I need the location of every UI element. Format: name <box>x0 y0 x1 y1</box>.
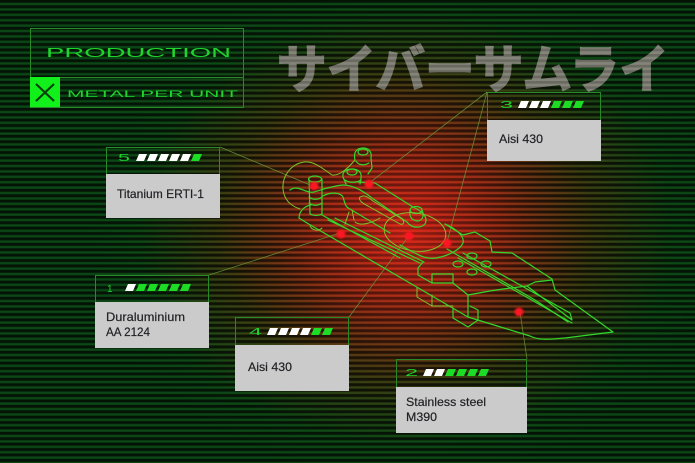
handle outer outline <box>283 160 355 209</box>
red marker dots <box>310 180 524 316</box>
knife wireframe drawing <box>283 148 613 339</box>
panel: material 2 stainless steel: M390 <box>406 410 437 424</box>
number 2: 2 <box>405 368 419 379</box>
label: Duraluminium <box>106 310 185 324</box>
title: サイバーサムライ <box>277 42 669 100</box>
bolt holes <box>453 253 491 275</box>
panel: material 4 aisi <box>235 318 349 391</box>
subheading text: METAL PER UNIT <box>67 89 238 100</box>
number 1: 1 <box>107 284 113 295</box>
label: Titanium ERTI-1 <box>117 187 204 201</box>
rating bar <box>518 101 584 108</box>
panel: material 1 duraluminium: AA 2124 <box>106 325 150 339</box>
rating bar <box>267 328 333 335</box>
tang and block <box>417 262 527 327</box>
handle bolster curve <box>290 185 407 222</box>
panel: material 2 stainless steel <box>396 360 527 433</box>
knob top <box>354 148 372 174</box>
blade fuller <box>458 253 572 323</box>
heading text: PRODUCTION <box>46 46 231 60</box>
number 5: 5 <box>118 153 131 164</box>
label: Aisi 430 <box>499 132 543 146</box>
rating bar <box>136 154 202 161</box>
panel: material 3 aisi <box>487 92 601 161</box>
pivot disc <box>382 209 463 258</box>
rating bar <box>125 284 191 291</box>
blade belly <box>468 317 613 339</box>
upper slot bar <box>358 182 426 227</box>
blade spine <box>445 224 613 332</box>
label: Stainless steel <box>406 395 486 409</box>
panel: material 5 titanium <box>106 148 220 218</box>
long handle rails <box>299 205 468 317</box>
number 3: 3 <box>500 100 514 111</box>
label: Aisi 430 <box>248 360 292 374</box>
rear screw <box>410 206 423 221</box>
number 4: 4 <box>249 327 263 338</box>
leader lines <box>209 92 527 359</box>
rating bar <box>423 369 489 376</box>
icon: X checkbox <box>30 77 60 107</box>
heading block: production <box>30 28 244 108</box>
pivot post left <box>308 176 322 216</box>
panel: material 1 duraluminium <box>95 276 209 348</box>
knob middle <box>343 169 361 184</box>
